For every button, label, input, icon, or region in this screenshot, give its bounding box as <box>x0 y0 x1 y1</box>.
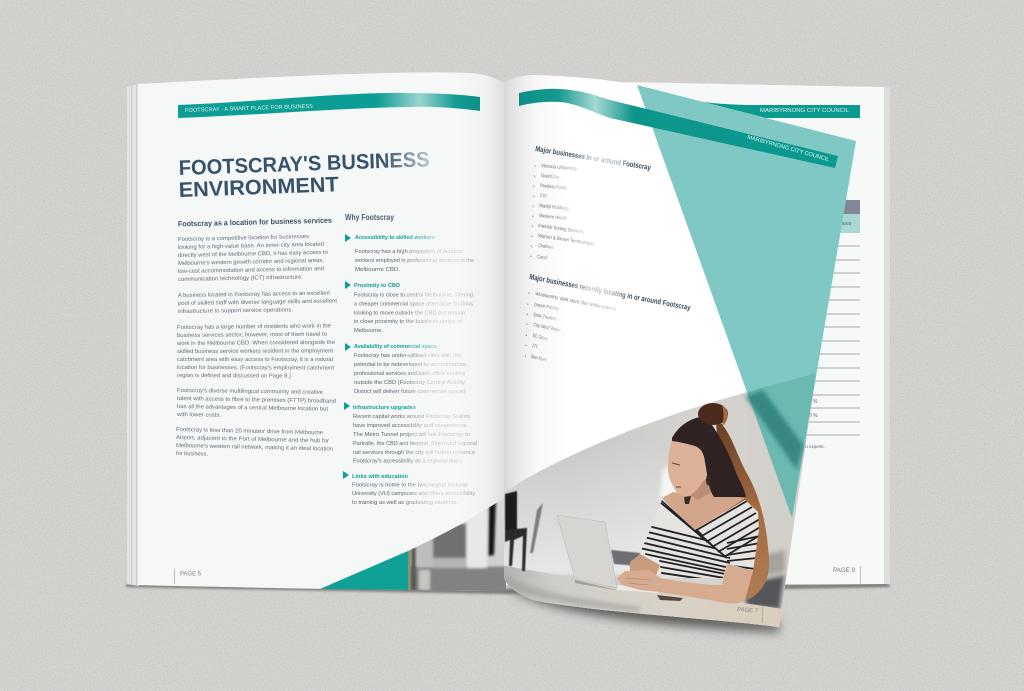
text block: location description: Airport, adjacent to the Port of Melbourne and the hub for <box>176 435 329 444</box>
text block: location description: has all the advantages of a central Melbourne location but <box>177 404 328 413</box>
icon: arrow <box>345 234 351 242</box>
striped top <box>640 500 759 578</box>
list: major businesses: Peerless Foods <box>540 183 568 192</box>
list: major businesses: • <box>532 224 534 230</box>
text block: location description: communication technology (ICT) infrastructure. <box>178 275 303 283</box>
section: accessibility to skilled workers: workers employed in professional services in the <box>354 258 475 264</box>
text block: location description: Footscray's diverse multilingual community and creative <box>177 388 323 396</box>
section: availability of commercial space: outside the CBD (Footscray Central Activity <box>354 380 465 386</box>
list: major businesses: • <box>531 234 533 240</box>
list: recently locating: City West Water <box>533 322 561 334</box>
list: recently locating: • <box>526 333 528 339</box>
page number 9: PAGE 9 <box>833 567 856 574</box>
title: ENVIRONMENT <box>178 173 339 202</box>
photo corner with teal wedge <box>320 498 506 591</box>
blurred chair <box>505 491 543 571</box>
page number 6: PAGE 6 <box>180 572 202 578</box>
list: major businesses: Wattyl Holdings <box>539 203 570 212</box>
section: accessibility to skilled workers: Footscray has a high proportion of resident <box>355 249 463 255</box>
section: links with education: to training as well as graduating students. <box>352 500 458 506</box>
section: availability of commercial space: Availability of commercial space <box>354 344 438 350</box>
heading: recently locating: Major businesses recently locating in or around Footscray <box>529 272 692 312</box>
page sheet <box>504 75 856 627</box>
section: infrastructure upgrades: Parkville, the CBD and beyond. (Improved regional <box>353 441 477 447</box>
list: recently locating: • <box>527 302 529 308</box>
photo: woman working on laptop <box>504 373 816 627</box>
list: major businesses: Warren & Brown Technologies <box>538 233 595 247</box>
section: accessibility to skilled workers <box>345 234 475 273</box>
text block: location description: skilled business service workers resident in the employment <box>177 348 333 355</box>
list: major businesses: • <box>532 214 534 220</box>
section: availability of commercial space: professional services and back-office centres <box>354 371 465 377</box>
section: proximity to CBD <box>345 281 473 334</box>
laptop <box>557 515 683 601</box>
section: proximity to CBD: looking to move outside the CBD but remain <box>354 310 465 316</box>
panel: left page (page 6) <box>127 72 510 595</box>
header band: Maribyrnong City Council <box>686 99 860 118</box>
page number 7: PAGE 7 <box>737 607 759 615</box>
list: recently locating: • <box>524 354 526 360</box>
right arm and hands <box>617 564 753 603</box>
section: proximity to CBD: Melbourne. <box>354 328 383 334</box>
list: recently locating: Dream Factory <box>534 302 560 312</box>
list: recently locating: • <box>526 322 528 328</box>
page number 9 <box>833 566 861 584</box>
list: recently locating: • <box>528 291 530 297</box>
section: infrastructure upgrades: Footscray's accessibility as a regional hub.) <box>353 458 462 464</box>
list: major businesses: Intertek Testing Services <box>538 223 585 235</box>
list: major businesses: CSR <box>540 193 548 200</box>
page stack edge <box>700 85 890 585</box>
heading: major businesses: Major businesses in or around Footscray <box>535 144 652 172</box>
page number 6 <box>174 569 202 584</box>
list: major businesses: • <box>530 254 532 260</box>
text block: location description: Melbourne's western growth corridor and regional areas, <box>178 258 324 267</box>
list: major businesses: Cargill <box>537 254 548 261</box>
table: nous <box>840 221 852 227</box>
section: accessibility to skilled workers: Melbourne CBD. <box>355 267 400 273</box>
book shadow <box>126 583 890 632</box>
list: recently locating: TIC Group <box>532 333 549 342</box>
list: recently locating: State Trustees <box>533 312 558 323</box>
table: ion experts. <box>802 444 825 449</box>
eye and lips <box>672 463 681 487</box>
section: proximity to CBD: in close proximity to the business centre of <box>354 319 462 325</box>
section: proximity to CBD: Footscray is close to central Melbourne, offering <box>354 292 473 298</box>
section: availability of commercial space <box>345 343 467 395</box>
text block: location description: low-cost accommodation and access to information and <box>178 266 324 275</box>
table: 7 % <box>809 399 818 405</box>
table surface <box>504 566 782 627</box>
list: recently locating: Woolworths 'dark store' (for online orders) <box>535 291 617 313</box>
photo background <box>504 373 816 626</box>
list: major businesses: • <box>534 174 536 180</box>
list: major businesses: • <box>534 164 536 170</box>
section: infrastructure upgrades: have improved accessibility and convenience. <box>353 423 468 429</box>
dark hair <box>672 417 746 497</box>
section: availability of commercial space: District will deliver future commercial space). <box>354 389 467 395</box>
list: recently locating: • <box>525 343 527 349</box>
text block: location description: region is defined and discussed on Page 8.) <box>177 373 291 380</box>
section: accessibility to skilled workers: Accessibility to skilled workers <box>355 235 436 241</box>
text block: location description: Footscray has a large number of residents who work in the <box>177 323 331 331</box>
section: links with education: Footscray is home to the two largest Victoria <box>352 482 468 488</box>
section: proximity to CBD: a cheaper commercial space alternative for firms <box>354 302 473 308</box>
text block: location description: business services sector; however, most of them travel to <box>177 332 327 339</box>
list: major businesses: Western Health <box>539 213 567 222</box>
earring <box>706 474 710 486</box>
section: proximity to CBD: Proximity to CBD <box>354 283 400 289</box>
section: infrastructure upgrades: rail services through the city will further enhance <box>353 450 476 456</box>
section: links with education: University (VU) campuses and offers accessibility <box>352 491 475 497</box>
section: links with education: Links with education <box>352 474 408 480</box>
text block: location description: talent with access to fibre to the premises (FTTP) broadband <box>177 396 336 405</box>
teal overlay on photo <box>743 373 816 518</box>
section: links with education <box>343 471 475 506</box>
heading: Footscray as a location: Footscray as a location for business services <box>178 216 332 228</box>
list: major businesses: Victoria University <box>541 163 578 172</box>
text block: location description: Footscray is less than 20 minutes' drive from Melbourne <box>176 427 323 436</box>
heading: Why Footscray: Why Footscray <box>345 213 395 222</box>
title: FOOTSCRAY'S BUSINESS <box>178 148 430 180</box>
teal triangle <box>637 85 856 518</box>
text block: location description: location for businesses. (Footscray's employment catchment <box>177 365 334 372</box>
section: availability of commercial space: potential to be redeveloped to accommodate <box>354 362 467 368</box>
table: % <box>809 380 814 386</box>
text block: location description: for business. <box>176 451 208 458</box>
text block: location description: directly west of the Melbourne CBD, it has easy access to <box>178 250 328 259</box>
list: major businesses: Chalmers <box>538 243 555 251</box>
table <box>780 200 860 449</box>
page stack edge <box>127 84 139 586</box>
icon: arrow <box>343 471 349 479</box>
text block: location description: catchment area with easy access to Footscray, it is a natural <box>177 357 333 363</box>
page sheet <box>138 72 505 591</box>
left arm <box>630 554 660 575</box>
title <box>178 148 430 202</box>
icon: arrow <box>345 343 351 351</box>
section: infrastructure upgrades: The Metro Tunnel project will link Footscray to <box>353 432 471 438</box>
header band: FOOTSCRAY - A SMART PLACE FOR BUSINESS <box>185 104 313 114</box>
text block: location description: infrastructure to support service operations. <box>178 307 293 315</box>
hair bun <box>698 403 728 425</box>
header band: Maribyrnong City Council: MARIBYRNONG CITY COUNCIL <box>746 135 830 163</box>
text block: location description: work in the Melbourne CBD. When considered alongside the <box>176 340 335 347</box>
page number 7 <box>737 607 763 623</box>
header band: Maribyrnong City Council <box>519 89 838 168</box>
header band <box>178 93 480 118</box>
list: major businesses <box>530 163 595 261</box>
neck and chest <box>662 492 745 530</box>
woman <box>617 403 769 603</box>
text block: location description: pool of skilled staff with diverse language skills and excellent <box>178 298 337 307</box>
text block: location description: with lower costs. <box>176 412 221 419</box>
list: major businesses: • <box>532 204 534 210</box>
list: major businesses: • <box>533 184 535 190</box>
icon: arrow <box>345 281 351 289</box>
list: recently locating: JTC <box>532 343 539 350</box>
text block: location description: Footscray is a competitive location for businesses <box>178 234 309 243</box>
section: infrastructure upgrades <box>344 402 477 464</box>
list: major businesses: • <box>530 244 532 250</box>
dark counter behind laptop <box>611 550 640 566</box>
page sheet <box>505 82 884 585</box>
panel: curled front page (page 7) <box>495 75 856 640</box>
list: recently locating: Ben Kyett <box>531 354 548 363</box>
long auburn hair <box>716 418 769 600</box>
list: recently locating <box>524 291 617 363</box>
list: major businesses: GrainCorp <box>541 173 559 181</box>
hair lock at shoulder <box>684 496 691 504</box>
panel: back right page (page 9) <box>505 82 890 585</box>
text block: location description: looking for a high-value base. An inner-city area located <box>178 242 324 251</box>
text block: location description <box>176 234 337 458</box>
face <box>668 440 708 496</box>
icon: arrow <box>344 402 350 410</box>
table: 3 % <box>809 413 818 419</box>
text block: location description: Melbourne's western rail network, making it an ideal location <box>176 443 333 453</box>
section: availability of commercial space: Footscray has under-utilised sites with the <box>354 353 462 359</box>
section: infrastructure upgrades: Infrastructure upgrades <box>353 405 417 411</box>
list: recently locating: • <box>526 312 528 318</box>
list: major businesses: • <box>533 194 535 200</box>
section: infrastructure upgrades: Recent capital works around Footscray Station <box>353 414 470 420</box>
text block: location description: A business located in Footscray has access to an excellent <box>178 291 330 299</box>
header band: Maribyrnong City Council: MARIBYRNONG CITY COUNCIL <box>760 108 849 114</box>
